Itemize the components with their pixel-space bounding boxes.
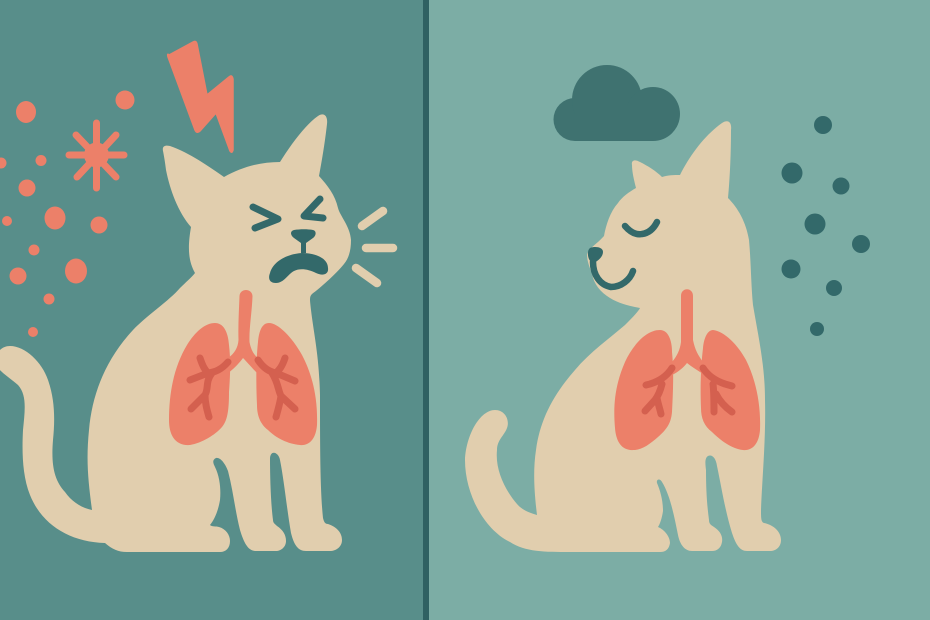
face: nose — [291, 229, 316, 253]
panel: healthy cat background — [429, 0, 930, 620]
left lobe — [614, 330, 673, 450]
left lobe — [169, 323, 230, 445]
icon: allergen particles — [0, 90, 134, 337]
face: nose and smile — [588, 247, 633, 287]
left bronchi — [190, 358, 228, 417]
panel: irritated cat background — [0, 0, 423, 620]
irritated cat — [0, 114, 393, 552]
smile — [593, 262, 633, 287]
icon: clean air particles — [782, 116, 870, 336]
left bronchi — [645, 368, 672, 414]
right bronchi — [258, 358, 295, 417]
trachea — [672, 289, 703, 375]
right lobe — [256, 323, 317, 445]
nose — [588, 247, 603, 263]
divider — [423, 0, 429, 620]
lungs — [169, 290, 317, 445]
cough lines — [356, 211, 393, 283]
icon: lightning bolt — [168, 41, 233, 152]
right bronchi — [703, 368, 732, 412]
face: closed eye — [625, 222, 657, 234]
icon: cloud — [554, 65, 680, 141]
cat body — [0, 114, 351, 552]
lungs — [614, 289, 760, 450]
icon: spiky allergen — [69, 123, 124, 188]
right lobe — [701, 330, 760, 450]
face: open mouth — [269, 253, 328, 283]
healthy cat — [465, 121, 781, 552]
trachea — [228, 290, 258, 374]
cat body — [465, 121, 781, 552]
face: squinting eyes — [253, 199, 323, 228]
